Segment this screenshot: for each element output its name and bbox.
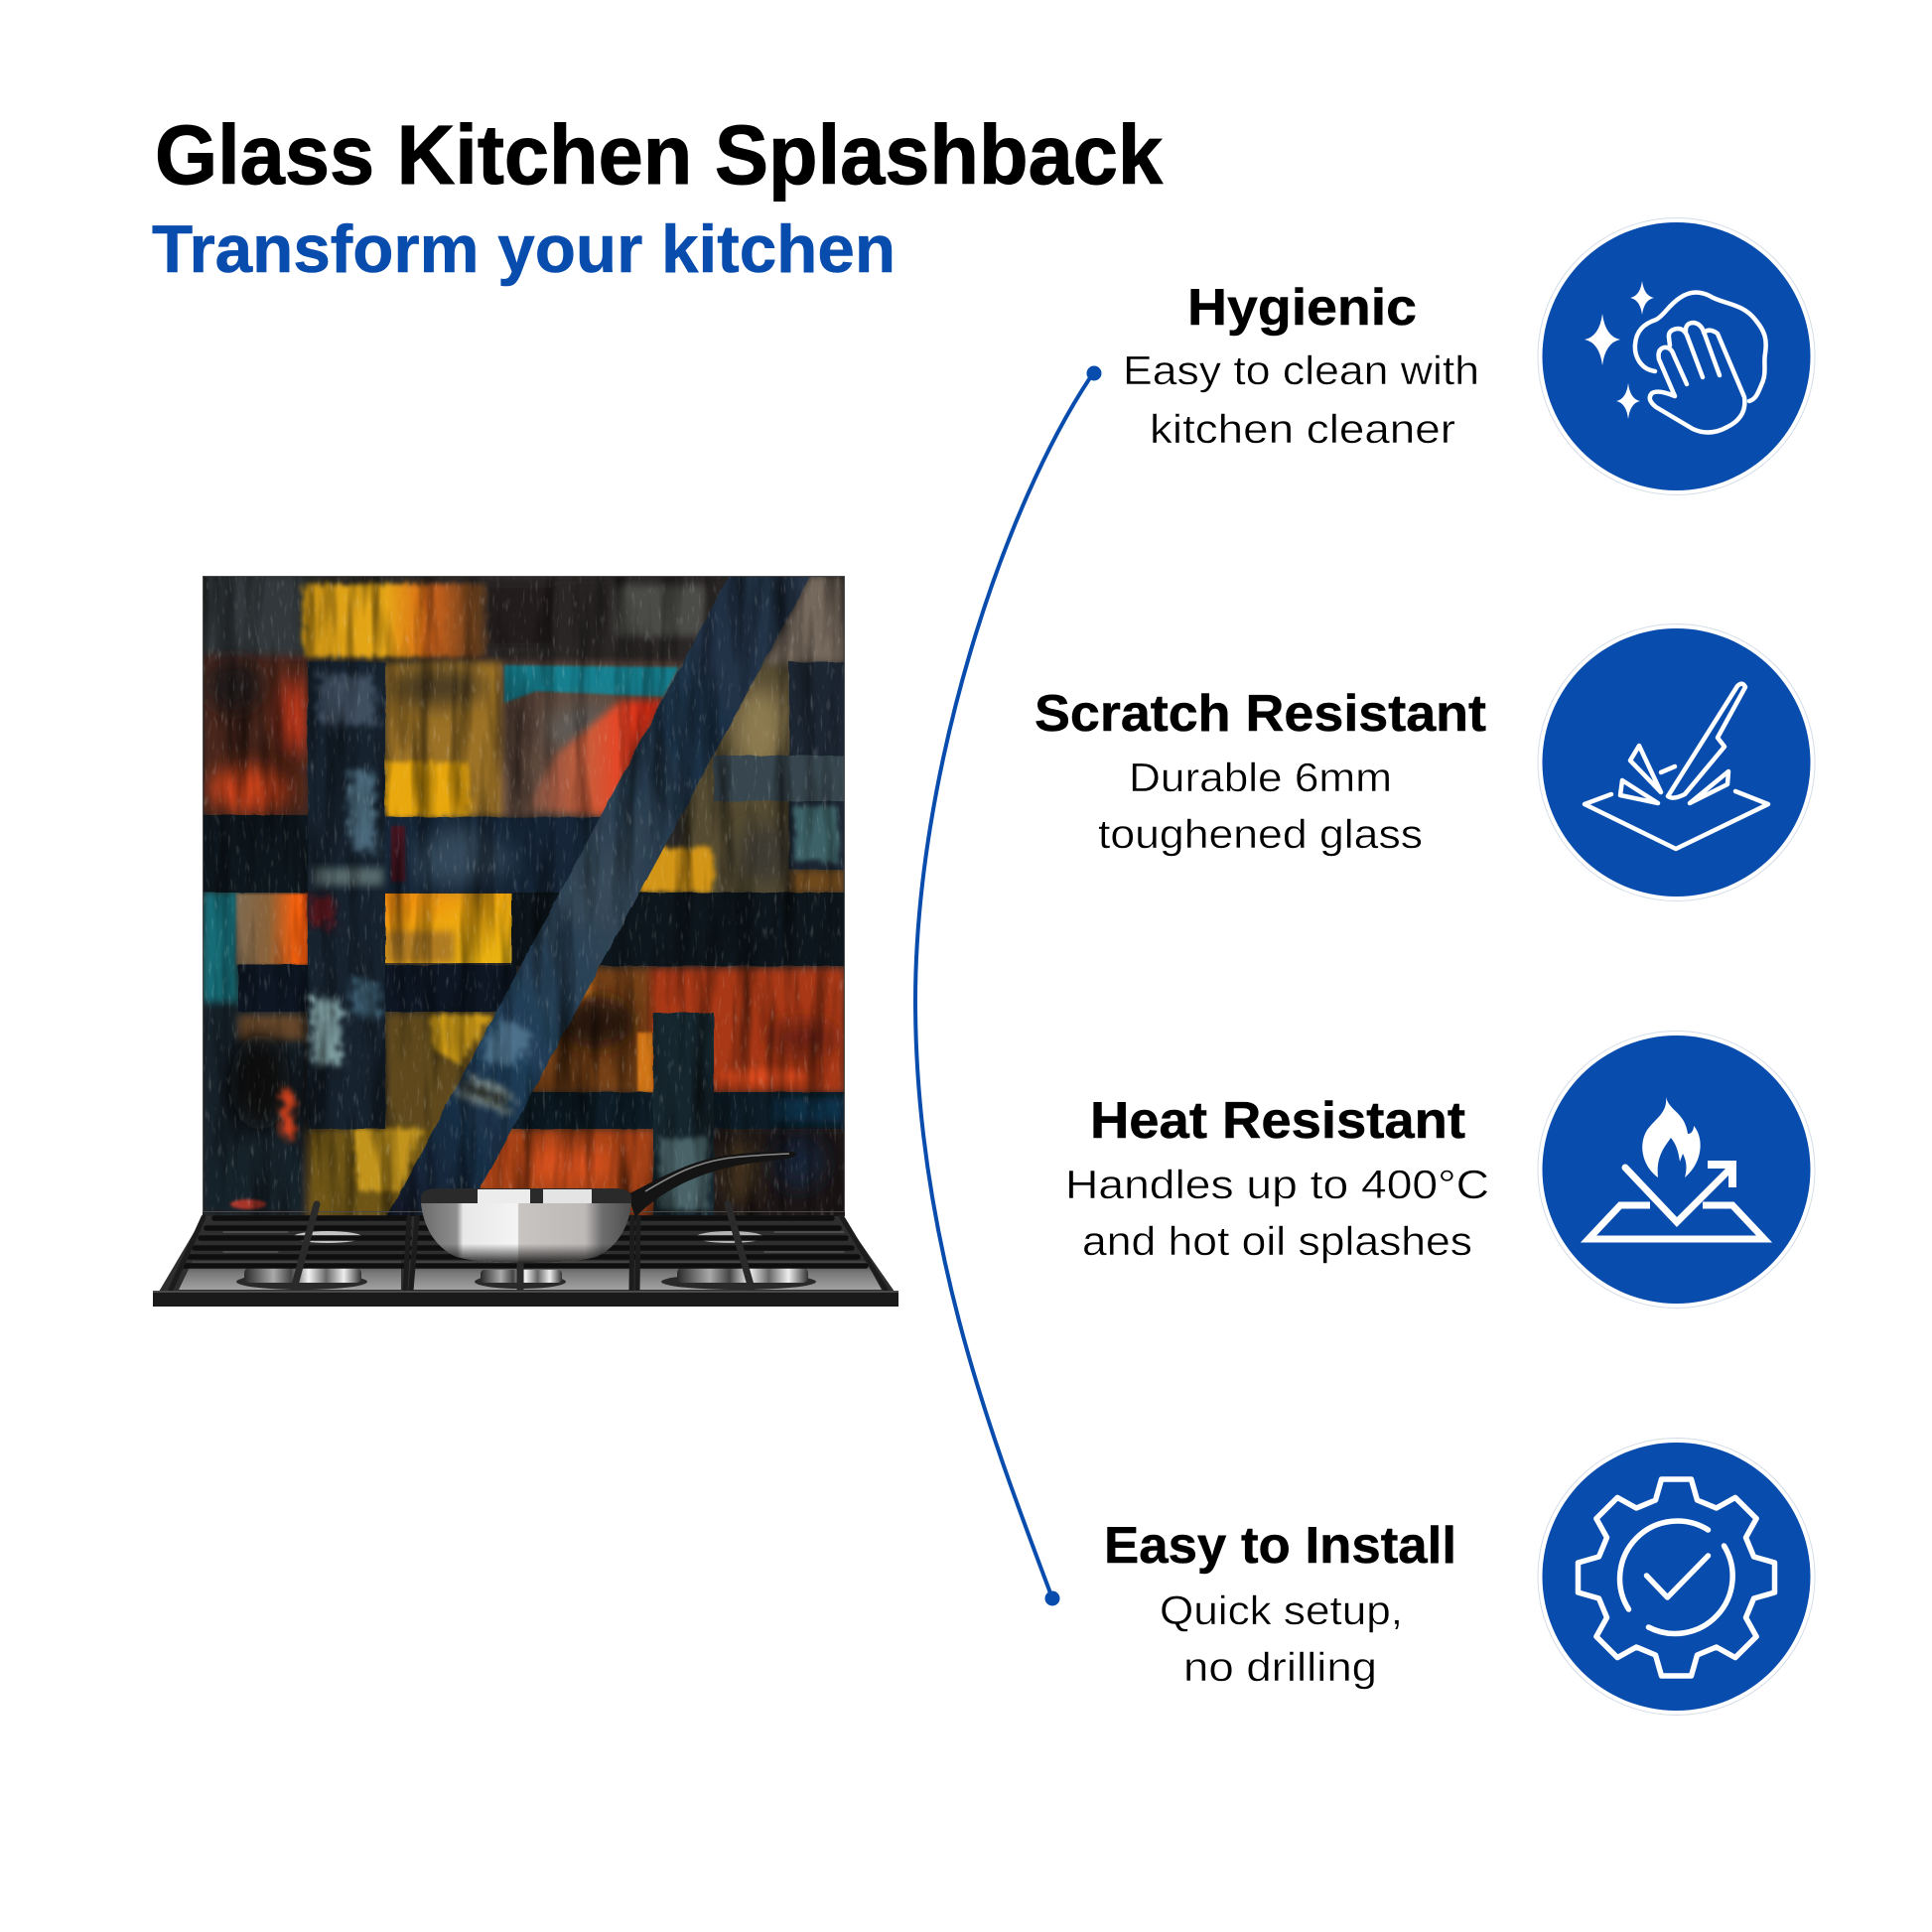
- description: [1098, 755, 1423, 857]
- description: Easy to clean with: [1123, 347, 1479, 393]
- burners: [236, 1231, 816, 1290]
- pan body: [421, 1203, 631, 1263]
- description: [1160, 1587, 1403, 1690]
- heading: Easy to Install: [1104, 1517, 1456, 1575]
- frying pan: [421, 1152, 796, 1263]
- red blobs left: [279, 675, 307, 759]
- description: toughened glass: [1098, 811, 1423, 857]
- brush texture: [203, 576, 845, 1216]
- splashback abstract painting: [203, 576, 845, 1218]
- feature: hygienic: [1123, 279, 1479, 452]
- description: kitchen cleaner: [1150, 406, 1455, 452]
- orange lower and right: [522, 1144, 614, 1183]
- icon: hand wiping with sparkles: [1538, 218, 1815, 494]
- pan handle: [627, 1152, 796, 1217]
- feature: heat resistant: [1065, 1092, 1489, 1264]
- gas stove: [153, 1204, 898, 1307]
- grates: [171, 1204, 886, 1291]
- lower left tones: [238, 1015, 308, 1040]
- heading: Hygienic: [1187, 279, 1417, 337]
- diagonal beam: [387, 576, 810, 1216]
- yellow block: [385, 894, 512, 963]
- description: [1065, 1162, 1489, 1264]
- arc bottom dot: [1044, 1590, 1060, 1606]
- pan interior: [421, 1188, 631, 1204]
- description: no drilling: [1183, 1644, 1377, 1690]
- front rail: [153, 1291, 898, 1307]
- heading: Scratch Resistant: [1035, 685, 1486, 743]
- stainless burner trays: [179, 1261, 882, 1290]
- cooktop surface: [159, 1216, 895, 1292]
- description: Quick setup,: [1160, 1587, 1403, 1633]
- description: and hot oil splashes: [1082, 1218, 1472, 1264]
- title: Glass Kitchen Splashback: [155, 108, 1163, 202]
- feature: easy to install: [1104, 1517, 1456, 1690]
- right side tan and yellow: [734, 688, 785, 771]
- arc top dot: [1086, 365, 1102, 381]
- heading: Heat Resistant: [1090, 1092, 1465, 1150]
- description: [1123, 347, 1479, 452]
- red wedge: [526, 700, 663, 816]
- product image: splashback painting above stove: [153, 576, 898, 1307]
- subtitle: Transform your kitchen: [152, 211, 896, 287]
- connector arc: [915, 365, 1102, 1606]
- painting edge: [203, 576, 844, 1211]
- feature: scratch resistant: [1035, 685, 1486, 857]
- top yellow stroke: [303, 584, 486, 657]
- ochre lower yellow: [385, 762, 469, 817]
- icon: flame on glass: [1538, 1031, 1815, 1309]
- icon: gear with check: [1538, 1438, 1815, 1716]
- dark bars: [203, 662, 845, 1216]
- teal stripe: [504, 665, 679, 703]
- gold lower: [429, 1015, 492, 1066]
- icon: knife scratching glass: [1538, 623, 1815, 901]
- description: Handles up to 400°C: [1065, 1162, 1489, 1207]
- description: Durable 6mm: [1129, 755, 1392, 800]
- bar patches: [320, 675, 375, 725]
- orange block: [236, 894, 308, 965]
